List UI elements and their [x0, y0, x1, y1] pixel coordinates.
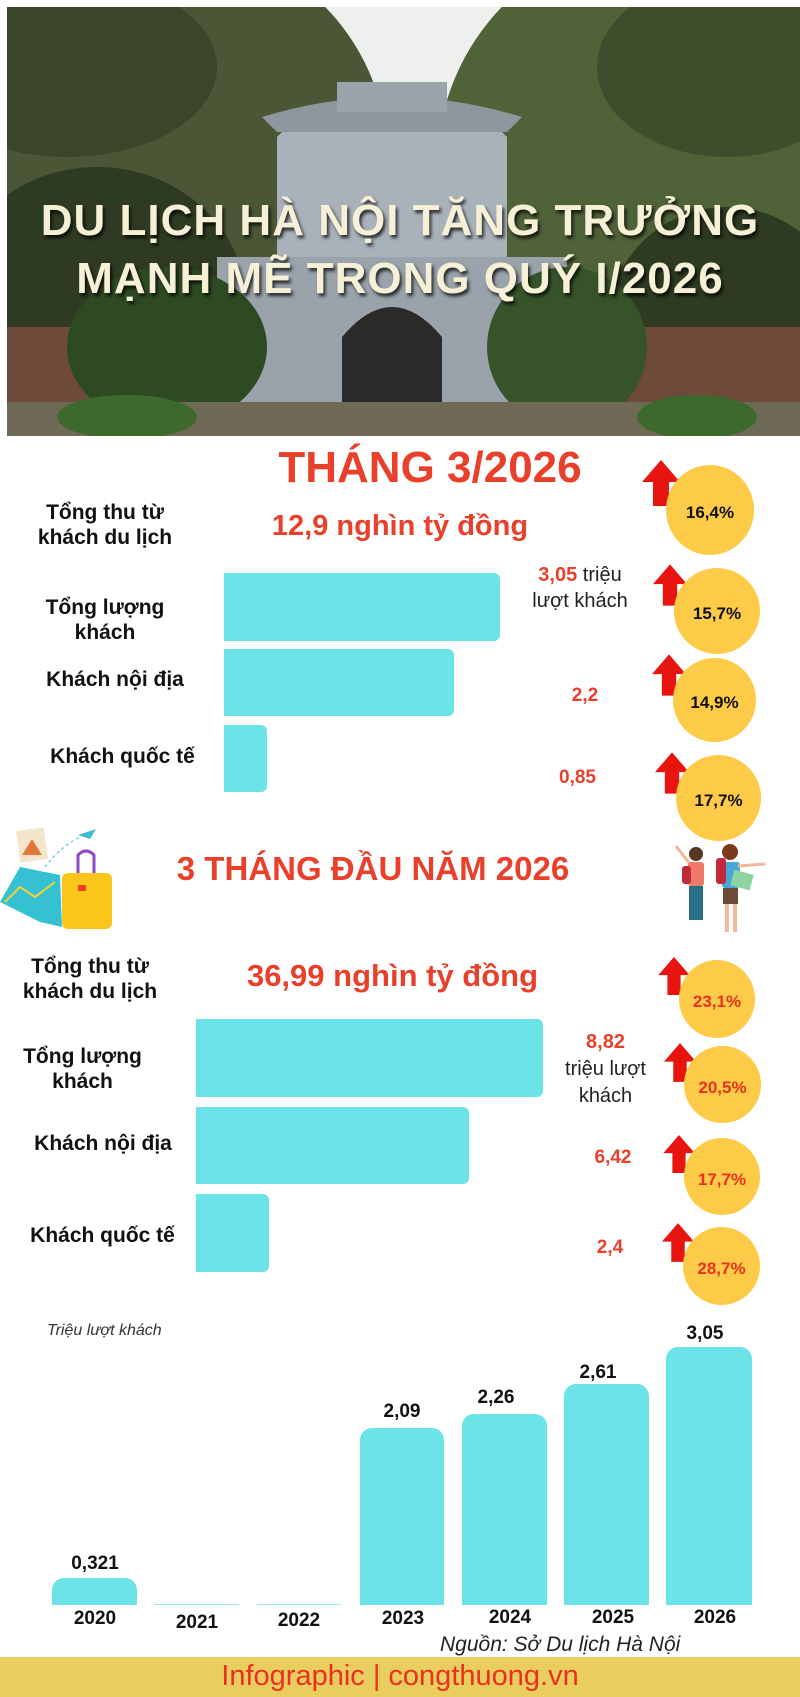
main title: [41, 196, 759, 306]
source: Nguồn: Sở Du lịch Hà Nội: [440, 1633, 680, 1656]
arrow s2-4: [662, 1223, 693, 1262]
circle 23,1%: 23,1%: [693, 992, 741, 1011]
bar chart: yearly visitors: 0,321: [71, 1553, 119, 1574]
section 2: total visitors: khách: [52, 1070, 113, 1093]
section 1: total visitors: [46, 596, 164, 644]
circle 15,7%: 15,7%: [693, 604, 741, 623]
circle 23,1%: [679, 960, 755, 1038]
bar 2025: [564, 1384, 649, 1605]
section 2: revenue label: [23, 955, 157, 1003]
section 1: revenue label: Tổng thu từ: [46, 501, 164, 524]
bar 2026: [666, 1347, 752, 1605]
section 1: revenue label: [38, 501, 172, 549]
section 1: total visitors: Tổng lượng: [46, 596, 164, 619]
value 8,82: khách: [579, 1085, 632, 1107]
section 1: domestic: Khách nội địa: [46, 668, 184, 691]
text: 2,4: [597, 1237, 623, 1258]
circle 14,9%: 14,9%: [690, 693, 739, 712]
section 2: domestic: Khách nội địa: [34, 1132, 172, 1155]
bar chart: yearly visitors: 2026: [694, 1607, 736, 1628]
bar 2024: [462, 1414, 547, 1605]
main title: DU LỊCH HÀ NỘI TĂNG TRƯỞNG: [41, 196, 759, 245]
bar chart: yearly visitors: 2020: [74, 1608, 116, 1629]
bar chart: yearly visitors: 2,61: [580, 1362, 616, 1383]
section 2 heading: 3 THÁNG ĐẦU NĂM 2026: [177, 850, 569, 887]
footer band: [0, 1657, 800, 1697]
circle 28,7%: 28,7%: [697, 1259, 746, 1278]
circle 15,7%: [674, 568, 760, 654]
text: 0,85: [559, 767, 596, 788]
arrow s2-2: [664, 1043, 694, 1082]
circle 17,7%: 17,7%: [698, 1170, 746, 1188]
bar 2020: [52, 1578, 137, 1605]
bar 2022: [257, 1604, 341, 1605]
icon: travel luggage: [0, 827, 112, 929]
arrow 1: [642, 460, 678, 506]
section 1 heading: THÁNG 3/2026: [278, 443, 582, 492]
bar chart: yearly visitors: 2,09: [384, 1401, 420, 1422]
arrow s2-3: [663, 1135, 694, 1173]
main title: MẠNH MẼ TRONG QUÝ I/2026: [76, 254, 724, 303]
section 1: total visitors: khách: [75, 621, 135, 644]
value 3,05: [532, 564, 628, 612]
section 2: international: Khách quốc tế: [30, 1224, 175, 1247]
section 2: total visitors: [23, 1045, 142, 1093]
bar chart: yearly visitors: 2023: [382, 1608, 424, 1629]
bar 2023: [360, 1428, 444, 1605]
bar 2021: [154, 1604, 239, 1605]
circle 20,5%: [684, 1046, 761, 1123]
circle 20,5%: 20,5%: [698, 1078, 747, 1096]
circle 16,4%: [666, 465, 754, 555]
bar chart: yearly visitors: 2025: [592, 1607, 634, 1628]
section 1: international: Khách quốc tế: [50, 745, 195, 768]
text: 2,2: [572, 685, 598, 706]
header photo: [7, 7, 800, 436]
section 1: revenue value: 12,9 nghìn tỷ đồng: [272, 510, 528, 542]
value 3,05: lượt khách: [532, 590, 628, 612]
bar chart: yearly visitors: 2,26: [478, 1387, 514, 1408]
icon: travellers: [674, 844, 765, 932]
section 1: revenue label: khách du lịch: [38, 526, 172, 549]
section 2: revenue label: khách du lịch: [23, 980, 157, 1003]
circle 17,7%: [684, 1138, 760, 1215]
value 8,82: [565, 1031, 646, 1107]
circle 17,7%: 17,7%: [694, 791, 743, 810]
arrow 3: [652, 654, 684, 696]
text: 6,42: [594, 1147, 631, 1168]
bar chart: yearly visitors: [52, 1323, 752, 1633]
section 2: revenue label: Tổng thu từ: [31, 955, 149, 978]
bar chart: yearly visitors: 2022: [278, 1610, 320, 1631]
arrow 2: [653, 564, 686, 606]
section 2: revenue value: 36,99 nghìn tỷ đồng: [247, 958, 538, 993]
arrow 4: [655, 752, 687, 794]
section 2: total visitors: Tổng lượng: [23, 1045, 142, 1068]
value 3,05: 3,05 triệu: [538, 564, 622, 586]
bar chart: yearly visitors: 2024: [489, 1607, 531, 1628]
value 8,82: 8,82: [586, 1031, 625, 1053]
circle 14,9%: [673, 658, 756, 742]
bar chart: yearly visitors: 2021: [176, 1612, 218, 1633]
chart unit label: Triệu lượt khách: [47, 1322, 162, 1339]
footer band: Infographic | congthuong.vn: [221, 1660, 579, 1692]
arrow s2-1: [658, 957, 688, 995]
value 8,82: triệu lượt: [565, 1058, 646, 1080]
bar chart: yearly visitors: 3,05: [686, 1323, 723, 1344]
circle 28,7%: [683, 1227, 760, 1305]
circle 17,7%: [676, 755, 761, 841]
circle 16,4%: 16,4%: [686, 503, 734, 522]
